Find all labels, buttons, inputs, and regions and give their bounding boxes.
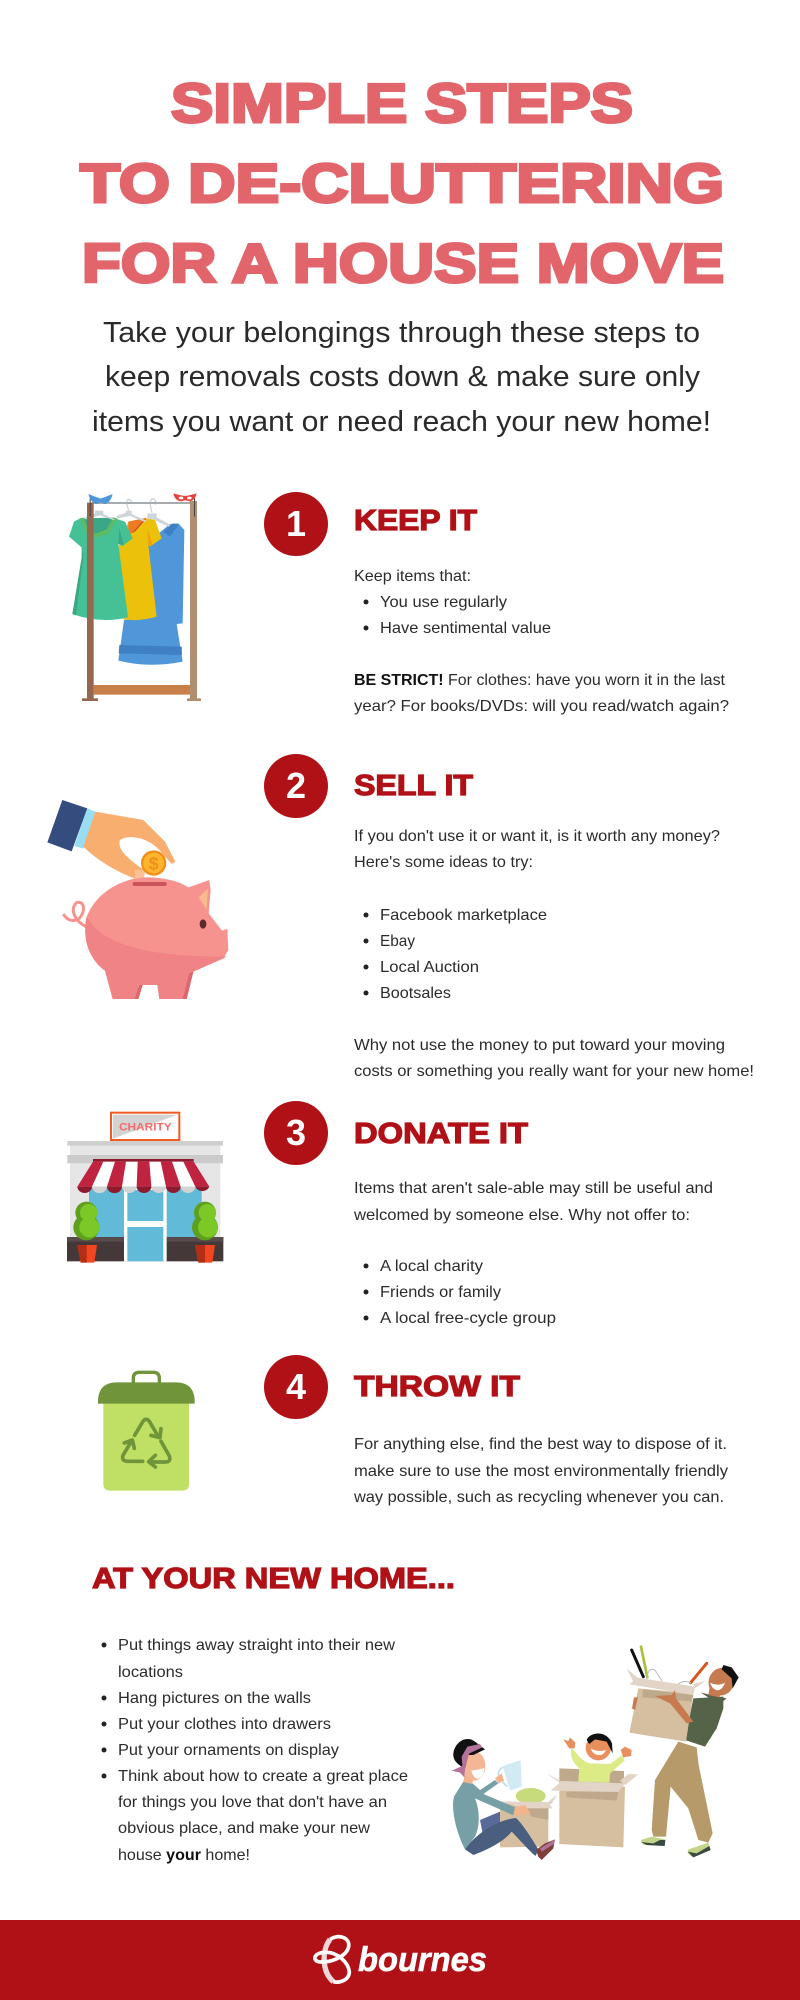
- illustration: family moving boxes: [452, 1647, 739, 1860]
- icon part: rack frame: [92, 502, 192, 504]
- number badge: [264, 1355, 328, 1419]
- body text: make sure to use the most environmentally friendly: [354, 1463, 728, 1480]
- body text: [353, 1180, 713, 1327]
- body text: Ebay: [380, 933, 415, 950]
- logo wordmark: bournes: [358, 1941, 487, 1979]
- heading: KEEP IT: [354, 505, 477, 537]
- list: at your new home: Put your clothes into drawers: [118, 1716, 331, 1733]
- body text: [354, 568, 729, 715]
- illustration part: large box: [547, 1773, 638, 1847]
- list: at your new home: house your home!: [118, 1847, 250, 1864]
- number badge: 1: [286, 503, 306, 544]
- body text: Friends or family: [380, 1284, 501, 1301]
- body text: Local Auction: [380, 959, 479, 976]
- heading: THROW IT: [354, 1371, 520, 1403]
- logo: bournes: [315, 1937, 487, 1982]
- icon part: bin body: [103, 1402, 189, 1491]
- step 2: [264, 754, 754, 1080]
- icon part: sign: CHARITY: [119, 1121, 172, 1133]
- icon: recycling bin: [98, 1372, 195, 1491]
- body text: You use regularly: [380, 594, 507, 611]
- body text: Bootsales: [380, 985, 451, 1002]
- body text: costs or something you really want for your new home!: [354, 1063, 754, 1080]
- body text: Why not use the money to put toward your moving: [354, 1037, 725, 1054]
- body text: For anything else, find the best way to dispose of it.: [354, 1436, 727, 1453]
- body text: A local free-cycle group: [380, 1310, 556, 1327]
- icon part: masks: [88, 494, 113, 504]
- title: FOR A HOUSE MOVE: [82, 232, 724, 294]
- body text: [353, 1436, 728, 1506]
- number badge: 3: [286, 1112, 306, 1153]
- intro text: items you want or need reach your new home!: [92, 406, 711, 438]
- icon part: green dress: [69, 518, 133, 620]
- number badge: [264, 1101, 328, 1165]
- footer band: [0, 1920, 800, 2000]
- list: at your new home: locations: [118, 1664, 183, 1681]
- body text: A local charity: [380, 1258, 483, 1275]
- body text: Here's some ideas to try:: [354, 854, 533, 871]
- body text: Facebook marketplace: [380, 907, 547, 924]
- body text: If you don't use it or want it, is it worth any money?: [354, 828, 720, 845]
- body text: year? For books/DVDs: will you read/watch again?: [354, 698, 729, 715]
- icon part: left plant: [73, 1202, 99, 1263]
- icon part: pig body: [85, 877, 228, 999]
- illustration part: jug: [503, 1760, 522, 1791]
- icon part: yellow dress: [117, 518, 162, 620]
- icon part: blue dress: [118, 523, 184, 665]
- illustration part: woman's box: [487, 1788, 557, 1847]
- step 4: [264, 1355, 728, 1506]
- icon: clothes rack: [69, 493, 201, 701]
- body text: way possible, such as recycling whenever you can.: [353, 1489, 724, 1506]
- icon part: building: [70, 1143, 220, 1240]
- logo mark: [315, 1937, 349, 1982]
- illustration part: carried box: [629, 1688, 693, 1742]
- icon: piggy bank with hand and coin: $: [149, 854, 159, 874]
- body text: Have sentimental value: [380, 620, 551, 637]
- number badge: 2: [286, 765, 306, 806]
- title: TO DE-CLUTTERING: [80, 152, 724, 214]
- title: [80, 72, 724, 294]
- illustration part: woman: [452, 1739, 555, 1860]
- step 1: [264, 492, 729, 715]
- icon: piggy bank with hand and coin: [47, 800, 228, 999]
- icon part: awning: [77, 1159, 209, 1193]
- icon part: lid: [98, 1372, 195, 1404]
- step 3: [264, 1101, 713, 1327]
- illustration part: man: [627, 1647, 739, 1857]
- illustration part: child in box: [559, 1734, 632, 1785]
- list: at your new home: obvious place, and make your new: [118, 1820, 370, 1837]
- icon part: right plant: [192, 1202, 218, 1263]
- icon part: sleeve and cuff: [47, 800, 87, 851]
- icon: charity shop: [67, 1113, 223, 1263]
- body text: Keep items that:: [354, 568, 471, 585]
- number badge: 4: [286, 1366, 306, 1407]
- number badge: [264, 492, 328, 556]
- number badge: [264, 754, 328, 818]
- title: SIMPLE STEPS: [171, 72, 633, 134]
- icon part: coin: [141, 850, 166, 876]
- body text: welcomed by someone else. Why not offer to:: [353, 1207, 690, 1224]
- list: at your new home: Think about how to create a great place: [118, 1768, 408, 1785]
- body text: BE STRICT! For clothes: have you worn it in the last: [354, 672, 726, 689]
- list: at your new home: Put your ornaments on display: [118, 1742, 339, 1759]
- icon part: pig tail: [63, 902, 86, 927]
- icon part: recycling arrows: [123, 1419, 170, 1467]
- body text: Items that aren't sale-able may still be useful and: [354, 1180, 713, 1197]
- icon part: hand: [83, 812, 175, 879]
- list: at your new home: for things you love that don't have an: [118, 1794, 387, 1811]
- list: at your new home: Hang pictures on the walls: [118, 1690, 311, 1707]
- body text: [354, 828, 754, 1080]
- heading: SELL IT: [354, 770, 473, 802]
- list: at your new home: Put things away straight into their new: [118, 1637, 395, 1654]
- heading: DONATE IT: [354, 1118, 528, 1150]
- icon part: sign: [111, 1113, 179, 1140]
- intro text: Take your belongings through these steps to: [103, 317, 700, 349]
- intro text: keep removals costs down & make sure only: [105, 361, 701, 393]
- illustration part: pans in box: [632, 1647, 707, 1685]
- icon part: door: [124, 1188, 167, 1261]
- heading: at your new home: AT YOUR NEW HOME...: [92, 1563, 455, 1595]
- intro text: [92, 317, 711, 438]
- list: at your new home: [102, 1637, 408, 1864]
